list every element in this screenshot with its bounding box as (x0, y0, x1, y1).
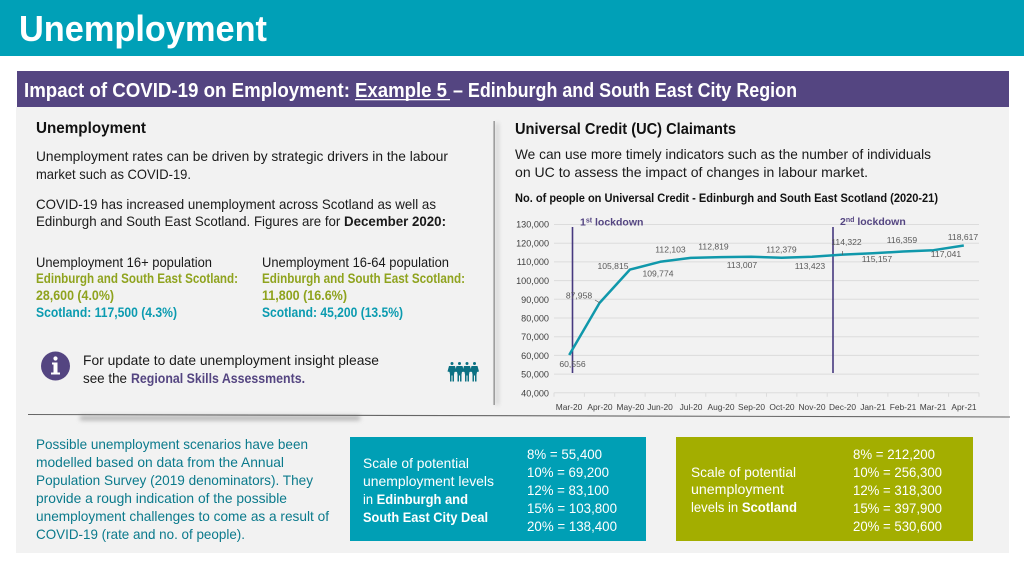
section header bar (17, 71, 1009, 107)
x axis labels: Nov-20 (798, 402, 826, 412)
y axis labels: 130,000 (516, 220, 549, 230)
icon: information (41, 352, 70, 380)
panel: scotland scale (676, 437, 973, 541)
vertical divider (494, 121, 498, 405)
panel: city deal scale: 12% = 83,100 (527, 482, 609, 498)
y axis labels: 110,000 (517, 257, 549, 267)
panel: city deal scale: unemployment levels (363, 473, 494, 489)
y axis labels: 40,000 (521, 388, 549, 398)
callout: regional skills assessments: Regional Skills Assessments. (131, 370, 305, 386)
line chart: universal credit claimants: nd (846, 217, 854, 224)
data labels: 87,958 (566, 290, 592, 300)
text block: scenarios: Population Survey (2019 denominators). They (36, 472, 313, 488)
data labels: 109,774 (642, 268, 674, 278)
x axis labels: Mar-20 (556, 402, 583, 412)
x axis labels: Mar-21 (920, 402, 947, 412)
panel: city deal scale: in Edinburgh and (363, 491, 468, 507)
stat block: 16-64 population: 11,800 (16.6%) (262, 288, 347, 303)
x axis labels: Aug-20 (707, 402, 735, 412)
data labels: 112,103 (655, 244, 686, 254)
y axis labels (516, 220, 549, 398)
stat block: 16+ population: 28,600 (4.0%) (36, 288, 114, 303)
title banner (0, 0, 1024, 56)
panel: city deal scale: Scale of potential (363, 455, 469, 471)
x axis labels: Apr-21 (951, 402, 977, 412)
text block: scenarios: COVID-19 (rate and no. of people). (36, 526, 245, 542)
stat block: 16-64 population: Unemployment 16-64 population (262, 255, 449, 270)
panel: city deal scale: 20% = 138,400 (527, 518, 617, 534)
leader lines (595, 251, 842, 303)
x axis labels: Sep-20 (738, 402, 765, 412)
section header bar: Example 5 (355, 80, 447, 102)
section header bar: Impact of COVID-19 on Employment: (24, 80, 350, 102)
panel: city deal scale: 8% = 55,400 (527, 446, 602, 462)
line chart: universal credit claimants: st (586, 218, 593, 224)
text block: scenarios: unemployment challenges to come as a result of (36, 508, 329, 524)
line chart: universal credit claimants: 2 (840, 216, 846, 228)
text block: scenarios: provide a rough indication of the possible (36, 490, 287, 506)
data labels: 60,556 (559, 359, 586, 369)
data labels: 105,815 (597, 261, 629, 271)
callout: regional skills assessments: For update to date unemployment insight please (83, 352, 379, 368)
panel: city deal scale: 15% = 103,800 (527, 500, 617, 516)
lockdown markers (572, 227, 833, 373)
line chart: universal credit claimants: lockdown (592, 216, 643, 228)
stat block: 16-64 population: Scotland: 45,200 (13.5%) (262, 305, 403, 320)
data line (569, 246, 964, 355)
panel: city deal scale (350, 437, 646, 541)
text block: timely indicators (515, 146, 931, 180)
y axis labels: 90,000 (521, 295, 549, 305)
panel: scotland scale: 10% = 256,300 (853, 464, 942, 480)
main panel background (16, 107, 1009, 553)
text block: timely indicators: on UC to assess the impact of changes in labour market. (515, 164, 868, 180)
text block: covid impact: COVID-19 has increased unemployment across Scotland as well as (36, 196, 436, 212)
stat block: 16+ population: Scotland: 117,500 (4.3%) (36, 305, 177, 320)
x axis labels: Jun-20 (647, 402, 673, 412)
x axis labels: Oct-20 (769, 402, 795, 412)
data labels: 117,041 (931, 249, 961, 259)
text block: scenarios: Possible unemployment scenarios have been (36, 436, 308, 452)
callout: regional skills assessments (83, 352, 379, 386)
data labels: 113,007 (727, 260, 757, 270)
panel: scotland scale: 12% = 318,300 (853, 482, 942, 498)
icon: people (448, 362, 479, 382)
text block: drivers: Unemployment rates can be driven by strategic drivers in the labour (36, 148, 448, 164)
panel: city deal scale: 10% = 69,200 (527, 464, 609, 480)
y axis labels: 80,000 (521, 314, 549, 324)
stat block: 16+ population: Edinburgh and South East Scotland: (36, 271, 238, 286)
panel: universal credit (515, 121, 979, 412)
data labels: 113,423 (795, 261, 825, 271)
panel: scotland scale: Scale of potential (691, 464, 796, 480)
line chart: universal credit claimants (516, 216, 979, 412)
chart title: No. of people on Universal Credit - Edinburgh and South East Scotland (2020-21) (515, 191, 938, 205)
panel: scotland scale: 8% = 212,200 (853, 446, 935, 462)
title banner: Unemployment (19, 8, 267, 49)
panel: scotland scale: unemployment (691, 481, 784, 497)
line chart: universal credit claimants: lockdown (854, 216, 906, 228)
panel: scotland scale: 15% = 397,900 (853, 500, 942, 516)
panel: unemployment text (36, 120, 479, 386)
panel: scotland scale: 20% = 530,600 (853, 518, 942, 534)
x axis labels: Jan-21 (860, 402, 886, 412)
heading: universal credit: Universal Credit (UC) Claimants (515, 121, 736, 138)
stat block: 16-64 population: Edinburgh and South East Scotland: (262, 271, 465, 286)
text block: drivers (36, 148, 448, 182)
stat block: 16+ population (36, 255, 238, 320)
text block: timely indicators: We can use more timely indicators such as the number of individuals (515, 146, 931, 162)
data labels: 112,819 (698, 242, 729, 252)
panel: city deal scale: South East City Deal (363, 509, 488, 525)
data labels (559, 232, 978, 369)
section header bar: – Edinburgh and South East City Region (453, 80, 797, 102)
y axis labels: 120,000 (516, 238, 549, 248)
y axis labels: 70,000 (521, 332, 549, 342)
text block: drivers: market such as COVID-19. (36, 166, 191, 182)
callout: regional skills assessments: see the (83, 370, 127, 386)
data labels: 115,157 (862, 254, 892, 264)
x axis labels: Jul-20 (680, 402, 703, 412)
panel: scotland scale: levels in Scotland (691, 499, 797, 515)
text block: scenarios: modelled based on data from the Annual (36, 454, 284, 470)
y axis labels: 60,000 (521, 351, 549, 361)
x axis labels: Dec-20 (829, 402, 856, 412)
x axis labels: Apr-20 (587, 402, 613, 412)
heading: unemployment: Unemployment (36, 120, 147, 137)
x axis labels (556, 402, 977, 412)
y axis labels: 100,000 (516, 276, 549, 286)
text block: covid impact (36, 196, 446, 229)
text block: scenarios (36, 436, 329, 542)
x axis labels: Feb-21 (890, 402, 917, 412)
data labels: 116,359 (887, 235, 917, 245)
text block: covid impact: Edinburgh and South East Scotland. Figures are for December 2020: (36, 213, 446, 229)
y axis labels: 50,000 (521, 370, 549, 380)
stat block: 16-64 population (262, 255, 465, 320)
data labels: 112,379 (766, 244, 797, 254)
data labels: 118,617 (948, 232, 978, 242)
x axis labels: May-20 (617, 402, 645, 412)
horizontal divider (28, 414, 1010, 420)
stat block: 16+ population: Unemployment 16+ population (36, 255, 212, 270)
data labels: 114,322 (831, 237, 862, 247)
line chart: universal credit claimants: 1 (580, 216, 586, 228)
